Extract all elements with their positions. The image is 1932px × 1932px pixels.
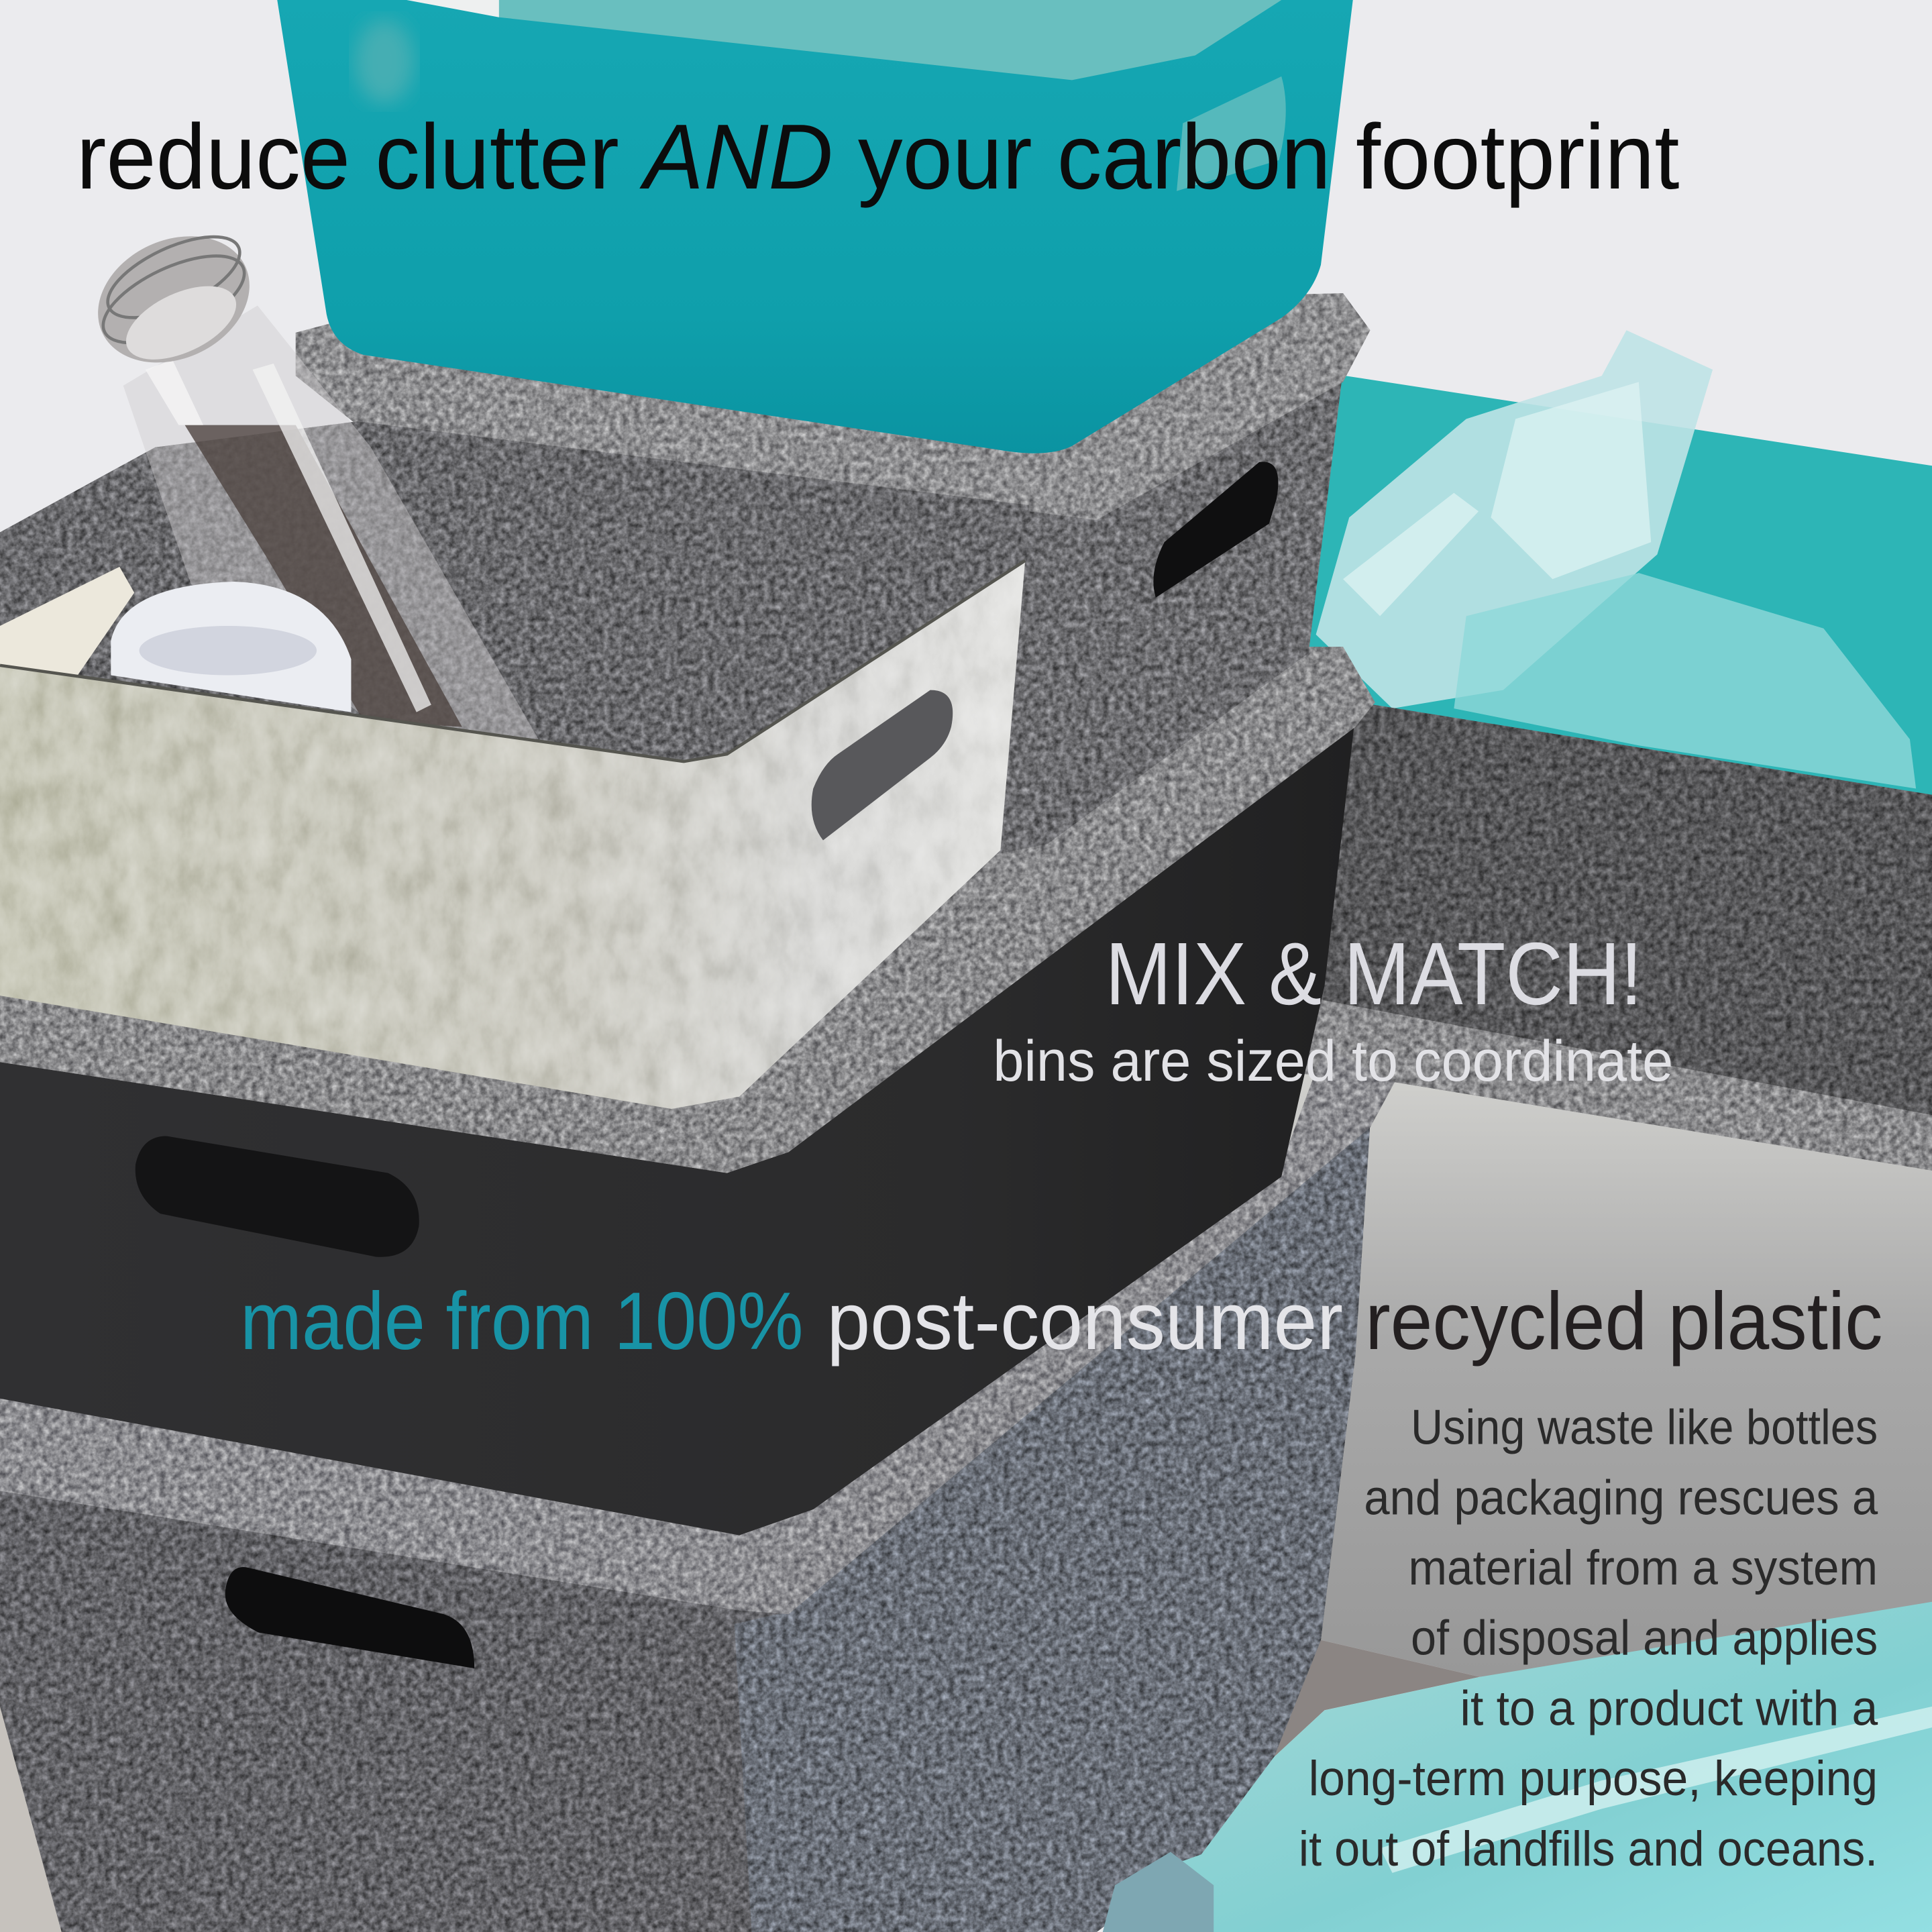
teal bin on top [277,0,1353,453]
handle [136,1136,419,1257]
teal interior [499,0,1281,80]
clear bottle upper [1316,330,1713,708]
body paragraph: and packaging rescues a [1364,1469,1878,1525]
front bottle, aqua [1103,1602,1932,1932]
handle glow [1177,76,1286,191]
title: reduce clutter AND your carbon footprint [76,105,1679,209]
body paragraph: it to a product with a [1460,1680,1878,1735]
black bin [0,647,1375,1536]
window through white bin [0,567,134,676]
body paragraph [1299,1399,1878,1876]
headline: made from recycled plastic: made from 100% [240,1275,804,1366]
back white bin [1232,985,1932,1757]
body paragraph: long-term purpose, keeping [1309,1750,1878,1806]
back teal bin with bottles [1287,330,1932,801]
body paragraph: Using waste like bottles [1411,1399,1878,1455]
body paragraph: it out of landfills and oceans. [1299,1821,1878,1876]
headline: made from recycled plastic: post-consumer [826,1275,1343,1366]
handle hole [225,1567,474,1668]
headline: made from recycled plastic: recycled plastic [1365,1275,1883,1366]
clear bottle with cap [77,213,539,739]
body paragraph: material from a system [1408,1540,1878,1595]
cream felt bin front [0,561,1025,1109]
rim [0,1047,1395,1614]
marbled white bin interior [0,421,1035,770]
handle [812,690,953,841]
headline: made from recycled plastic [240,1275,1883,1366]
body paragraph: of disposal and applies [1411,1610,1878,1666]
back grey felt bin [1281,705,1932,1128]
clear bottle lower [1454,573,1916,789]
handle [1153,462,1278,598]
heading: mix and match: MIX & MATCH! [1106,924,1642,1024]
small grey bin [296,293,1370,857]
subheading: bins sized: bins are sized to coordinate [993,1029,1673,1093]
bottle cap [111,582,351,712]
floor [0,1688,74,1932]
bottom large grey bin [0,1047,1395,1932]
bottle neck threads [77,213,270,386]
rim [0,647,1375,1173]
